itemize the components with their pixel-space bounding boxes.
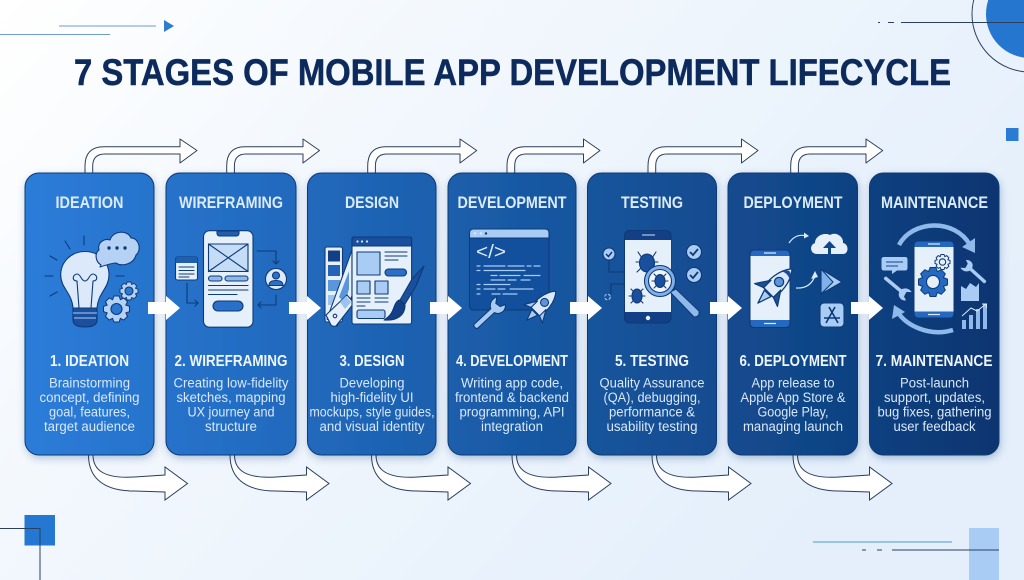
icon: code window, wrench and rocket bbox=[469, 229, 565, 333]
heading: development: DEVELOPMENT bbox=[458, 194, 566, 212]
bottom flow arrows bbox=[88, 455, 892, 500]
description: user feedback bbox=[894, 419, 976, 434]
step heading: 5. TESTING bbox=[615, 353, 689, 370]
description: structure bbox=[205, 419, 257, 434]
decoration: top left lines and triangle bbox=[0, 20, 174, 34]
description: App release to bbox=[752, 376, 834, 390]
heading: wireframing: WIREFRAMING bbox=[179, 194, 283, 212]
description: integration bbox=[481, 419, 543, 434]
panel: ideation bbox=[25, 173, 154, 455]
description bbox=[174, 376, 289, 434]
description: and visual identity bbox=[320, 419, 425, 434]
step heading: 4. DEVELOPMENT bbox=[456, 353, 568, 370]
description: usability testing bbox=[606, 419, 698, 434]
description: Post-launch bbox=[900, 376, 969, 390]
description: Creating low-fidelity bbox=[174, 376, 289, 390]
panel: development bbox=[448, 173, 576, 455]
icon: colour swatches, layout and brush bbox=[325, 237, 424, 326]
connector arrows between panels bbox=[148, 296, 883, 320]
heading: deployment: DEPLOYMENT bbox=[744, 194, 842, 212]
description bbox=[878, 376, 992, 434]
description bbox=[310, 376, 434, 434]
description: support, updates, bbox=[884, 390, 985, 405]
description: concept, defining bbox=[40, 390, 140, 405]
icon: phone with gears, cycle arrows and tools bbox=[880, 225, 990, 332]
description: Quality Assurance bbox=[600, 376, 704, 390]
decoration: top right circles and line bbox=[878, 0, 1024, 141]
step heading: 2. WIREFRAMING bbox=[174, 353, 288, 370]
icon: light bulb with speech bubble and gears bbox=[45, 232, 139, 327]
step heading: 3. DESIGN bbox=[340, 353, 404, 370]
step heading: 7. MAINTENANCE bbox=[876, 353, 993, 370]
description bbox=[40, 376, 140, 434]
icon: phone with bugs and magnifier bbox=[603, 230, 702, 323]
description: Writing app code, bbox=[461, 376, 563, 390]
description bbox=[455, 376, 569, 434]
description: (QA), debugging, bbox=[604, 390, 700, 405]
description: managing launch bbox=[743, 419, 843, 434]
heading: design: DESIGN bbox=[345, 194, 399, 212]
panel: design bbox=[308, 173, 436, 455]
heading: maintenance: MAINTENANCE bbox=[881, 194, 988, 212]
description: UX journey and bbox=[188, 404, 274, 420]
description: target audience bbox=[44, 419, 135, 434]
panel: maintenance bbox=[870, 173, 999, 455]
description bbox=[600, 376, 704, 434]
description: Google Play, bbox=[758, 404, 828, 420]
panel: testing bbox=[588, 173, 716, 455]
description: programming, API bbox=[460, 404, 564, 420]
panel: deployment bbox=[728, 173, 858, 455]
icon: phone rocket and app stores bbox=[747, 232, 848, 328]
top flow arrows bbox=[85, 139, 883, 174]
icon: wireframe phone bbox=[176, 231, 286, 327]
heading: ideation: IDEATION bbox=[56, 194, 124, 212]
decoration: bottom left square bbox=[0, 515, 55, 580]
description: high-fidelity UI bbox=[330, 390, 414, 405]
description: bug fixes, gathering bbox=[878, 404, 992, 420]
decoration: bottom right block and lines bbox=[813, 528, 999, 580]
icon: code window, wrench and rocket: </> bbox=[476, 242, 506, 263]
panel: wireframing bbox=[166, 173, 296, 455]
description: Apple App Store & bbox=[740, 390, 846, 405]
description: Developing bbox=[340, 376, 404, 390]
description bbox=[740, 376, 846, 434]
description: mockups, style guides, bbox=[310, 404, 434, 420]
step heading: 6. DEPLOYMENT bbox=[740, 353, 847, 370]
description: performance & bbox=[609, 404, 695, 420]
description: frontend & backend bbox=[455, 390, 569, 405]
heading: testing: TESTING bbox=[621, 194, 683, 212]
step heading: 1. IDEATION bbox=[50, 353, 129, 370]
description: goal, features, bbox=[49, 404, 130, 420]
description: sketches, mapping bbox=[176, 390, 286, 405]
description: Brainstorming bbox=[49, 376, 130, 390]
